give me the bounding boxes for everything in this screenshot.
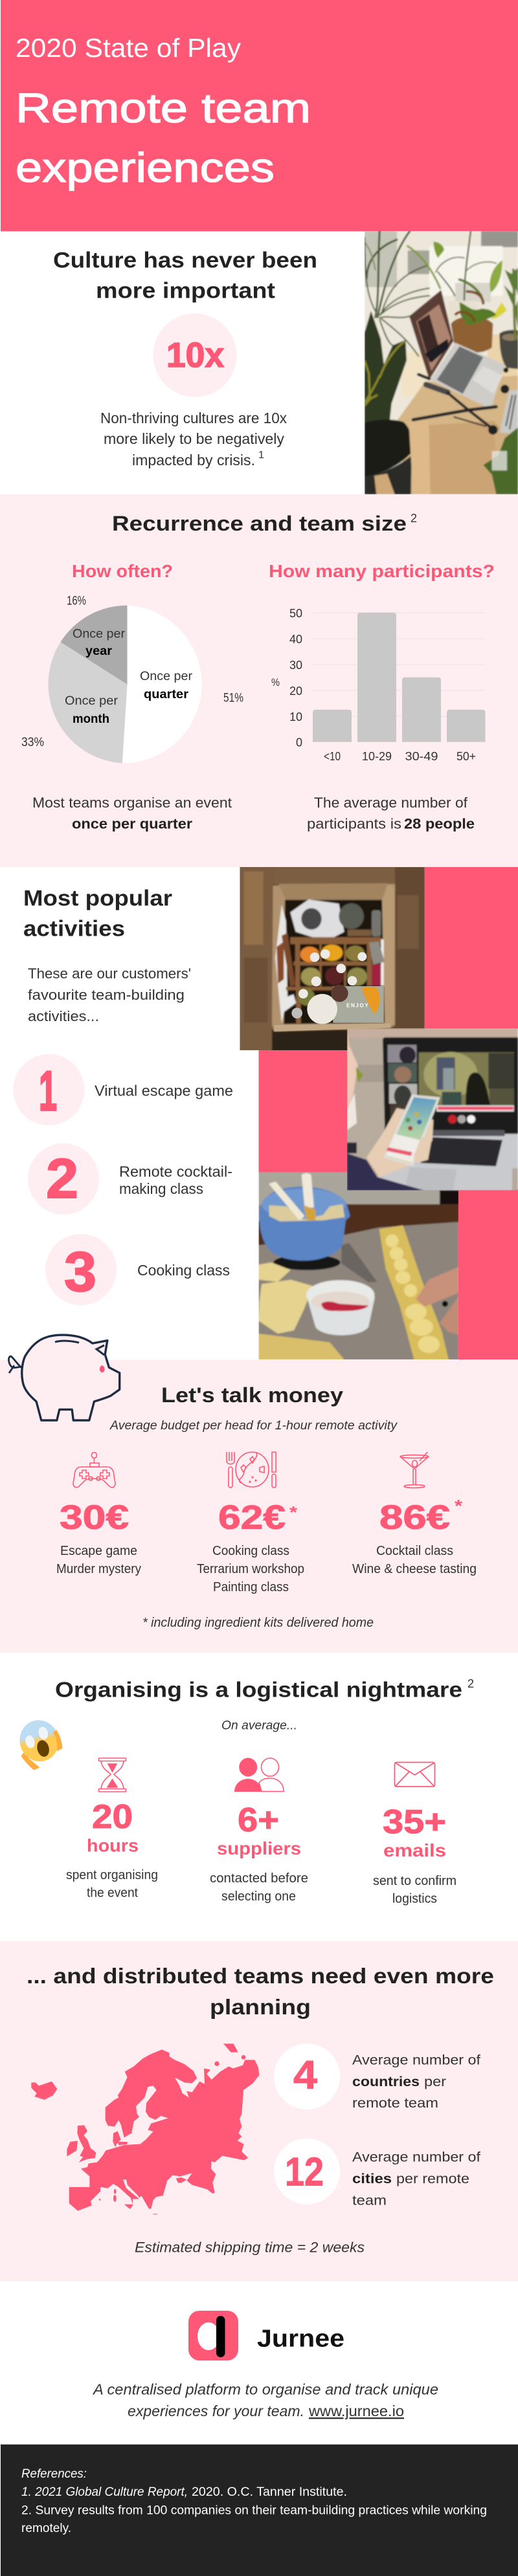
references text [21, 2467, 487, 2535]
culture text: 1 [258, 450, 264, 461]
icon: plate and cutlery [227, 1452, 276, 1488]
activities intro text: These are our customers' [28, 965, 191, 982]
caption: how often: once per quarter [72, 815, 192, 832]
panel: logistical nightmare [14, 1677, 474, 1906]
bar chart: 40 [289, 633, 302, 646]
10x stat circle: 10x [166, 336, 224, 375]
column: 62 euro: * [289, 1503, 298, 1522]
bar chart: 50 [289, 607, 302, 620]
stat: 12 cities: per remote [396, 2171, 469, 2186]
panel: most popular activities [13, 867, 518, 1360]
bar chart: % [271, 676, 280, 688]
column: 30 euro: 30€ [60, 1499, 129, 1537]
promo text: www.jurnee.io [308, 2403, 404, 2419]
activity 2: 2 [46, 1148, 78, 1210]
culture text: Non-thriving cultures are 10x [100, 410, 287, 426]
stat: 35+ emails [373, 1763, 456, 1906]
references text: 1. 2021 Global Culture Report, [21, 2485, 188, 2499]
logistics subtitle: On average... [221, 1719, 297, 1733]
header panel [1, 0, 518, 232]
pie chart: 51% [223, 691, 243, 705]
promo text: A centralised platform to organise and track unique [92, 2381, 438, 2398]
recurrence heading: 2 [411, 512, 417, 525]
panel: references [1, 2445, 518, 2576]
icon: screaming face emoji [14, 1715, 67, 1772]
column: 30 euro: Murder mystery [56, 1562, 141, 1576]
icon: envelope [395, 1763, 435, 1787]
column: 86 euro: Cocktail class [376, 1544, 453, 1558]
stat: 12 cities: 12 [285, 2150, 324, 2194]
stat: 4 countries: per [424, 2074, 446, 2089]
bar chart [271, 607, 486, 763]
column: 86 euro: * [455, 1496, 463, 1515]
icon: game controller [73, 1452, 115, 1488]
icon: hourglass [98, 1758, 126, 1792]
stat: 6+ suppliers: contacted before [210, 1871, 308, 1886]
caption: how often: Most teams organise an event [32, 795, 232, 811]
culture heading: Culture has never been [53, 248, 317, 273]
stat: 12 cities: team [352, 2193, 387, 2208]
activities intro text [28, 965, 191, 1024]
pie chart: 33% [21, 736, 44, 749]
stat: 20 hours: 20 [92, 1798, 133, 1836]
activity 1 [13, 1054, 233, 1125]
column: 62 euro: 62€ [218, 1499, 286, 1537]
distributed heading: planning [210, 1995, 311, 2019]
photo: pasta making [258, 1172, 459, 1360]
panel: distributed teams [0, 1941, 518, 2282]
Jurnee logo [188, 2311, 344, 2361]
references text: References: [21, 2467, 87, 2481]
references text: 2020. O.C. Tanner Institute. [192, 2485, 347, 2499]
stat: 35+ emails: emails [383, 1840, 446, 1860]
stat: 4 countries: Average number of [352, 2052, 480, 2067]
caption: how often [32, 795, 232, 832]
stat: 20 hours: the event [87, 1886, 138, 1900]
pie chart [21, 595, 243, 763]
ENJOY card lettering: ENJOY [346, 1003, 369, 1009]
header kicker: 2020 State of Play [16, 33, 242, 63]
money subtitle: Average budget per head for 1-hour remote activity [109, 1419, 398, 1433]
activity 3: Cooking class [137, 1262, 230, 1279]
caption: participants: The average number of [314, 795, 468, 811]
subheading: how often: How often? [72, 561, 173, 581]
money heading: Let's talk money [161, 1383, 343, 1407]
promo text [92, 2381, 438, 2419]
references text: remotely. [21, 2522, 71, 2535]
recurrence heading: Recurrence and team size [112, 512, 407, 535]
bar chart: 10 [289, 710, 302, 723]
stat: 6+ suppliers: selecting one [221, 1889, 296, 1904]
activity 3 [45, 1234, 230, 1305]
culture text: impacted by crisis. [132, 452, 255, 468]
stat: 20 hours: spent organising [66, 1868, 158, 1882]
activity 1: Virtual escape game [95, 1082, 233, 1099]
money footnote: * including ingredient kits delivered home [142, 1616, 374, 1630]
references text: 2. Survey results from 100 companies on their team-building practices while working [21, 2504, 487, 2518]
stat: 12 cities: cities [352, 2171, 392, 2186]
stat: 12 cities: Average number of [352, 2150, 480, 2165]
stat: 6+ suppliers [210, 1758, 308, 1904]
pie chart: year [85, 644, 113, 658]
photo: cocktail kit box [240, 867, 425, 1051]
column: 86 euro: Wine & cheese tasting [352, 1562, 477, 1576]
culture heading: more important [96, 279, 275, 303]
pie chart: month [73, 712, 109, 726]
pie chart: quarter [144, 688, 189, 701]
culture text [100, 410, 287, 468]
stat: 20 hours [66, 1758, 158, 1900]
activity 1: 1 [39, 1061, 57, 1123]
activities heading [23, 886, 172, 941]
caption: participants [307, 795, 475, 832]
stat: 4 countries: 4 [293, 2053, 318, 2098]
subheading: how many participants: How many participants? [269, 561, 495, 581]
stat: 35+ emails: logistics [392, 1892, 437, 1906]
column: 86 euro [352, 1452, 477, 1576]
column: 62 euro [197, 1452, 304, 1594]
photo: laptop among plants [365, 231, 518, 494]
pink blocks [259, 867, 518, 1360]
photo: video call with phone [347, 1028, 518, 1191]
pie chart: 16% [67, 595, 86, 608]
stat: 35+ emails: sent to confirm [373, 1874, 456, 1888]
column: 62 euro: Terrarium workshop [197, 1562, 304, 1576]
panel: recurrence and team size [0, 494, 518, 867]
stat: 12 cities [274, 2139, 480, 2208]
bar chart: 30 [289, 659, 302, 672]
logistics heading: Organising is a logistical nightmare [55, 1678, 462, 1702]
activity 2: Remote cocktail- [119, 1163, 232, 1180]
icon: two people [234, 1758, 284, 1792]
bar chart: 50+ [456, 750, 476, 763]
pie chart: Once per [65, 694, 118, 708]
logistics heading: 2 [467, 1677, 474, 1690]
culture heading [53, 248, 317, 303]
icon: cocktail glass [400, 1452, 429, 1488]
distributed heading [27, 1964, 494, 2019]
distributed heading: ... and distributed teams need even more [27, 1964, 494, 1988]
activities heading: activities [23, 916, 125, 941]
column: 86 euro: 86€ [379, 1499, 450, 1537]
activity 3: 3 [64, 1241, 96, 1303]
bar chart: 30-49 [405, 750, 438, 763]
stat: 6+ suppliers: suppliers [217, 1838, 301, 1858]
panel: culture [53, 231, 518, 494]
pie chart: Once per [73, 628, 126, 641]
stat: 4 countries [274, 2043, 480, 2111]
stat: 35+ emails: 35+ [383, 1803, 446, 1841]
activity 2: making class [119, 1180, 203, 1197]
column: 62 euro: Painting class [213, 1580, 289, 1594]
bar chart: 10-29 [362, 750, 392, 763]
bar chart: <10 [324, 750, 341, 763]
activities heading: Most popular [23, 886, 172, 911]
stat: 4 countries: countries [352, 2074, 420, 2089]
stat: 4 countries: remote team [352, 2095, 438, 2111]
bar chart: 20 [289, 685, 302, 698]
pie chart: Once per [140, 670, 193, 683]
column: 30 euro [56, 1452, 141, 1576]
map of Europe [31, 2043, 260, 2215]
column: 30 euro: Escape game [60, 1544, 137, 1558]
activities intro text: favourite team-building [28, 987, 185, 1003]
activity 2 [28, 1143, 232, 1215]
caption: participants: participants is [307, 815, 401, 832]
stat: 20 hours: hours [87, 1836, 139, 1856]
column: 62 euro: Cooking class [212, 1544, 289, 1558]
10x stat circle [153, 313, 237, 397]
caption: participants: 28 people [404, 815, 475, 832]
main title: experiences [16, 144, 275, 191]
Jurnee logo: Jurnee [257, 2326, 344, 2353]
culture text: more likely to be negatively [104, 430, 284, 447]
main title [16, 85, 311, 191]
bar chart: 0 [296, 736, 302, 749]
stat: 6+ suppliers: 6+ [238, 1801, 279, 1839]
panel: Jurnee promo [92, 2311, 438, 2419]
activities intro text: activities... [28, 1008, 99, 1024]
main title: Remote team [16, 85, 311, 131]
shipping time note: Estimated shipping time = 2 weeks [135, 2240, 365, 2256]
panel: let's talk money [0, 1335, 518, 1653]
icon: piggy bank [9, 1335, 120, 1420]
promo text: experiences for your team. [128, 2403, 304, 2419]
